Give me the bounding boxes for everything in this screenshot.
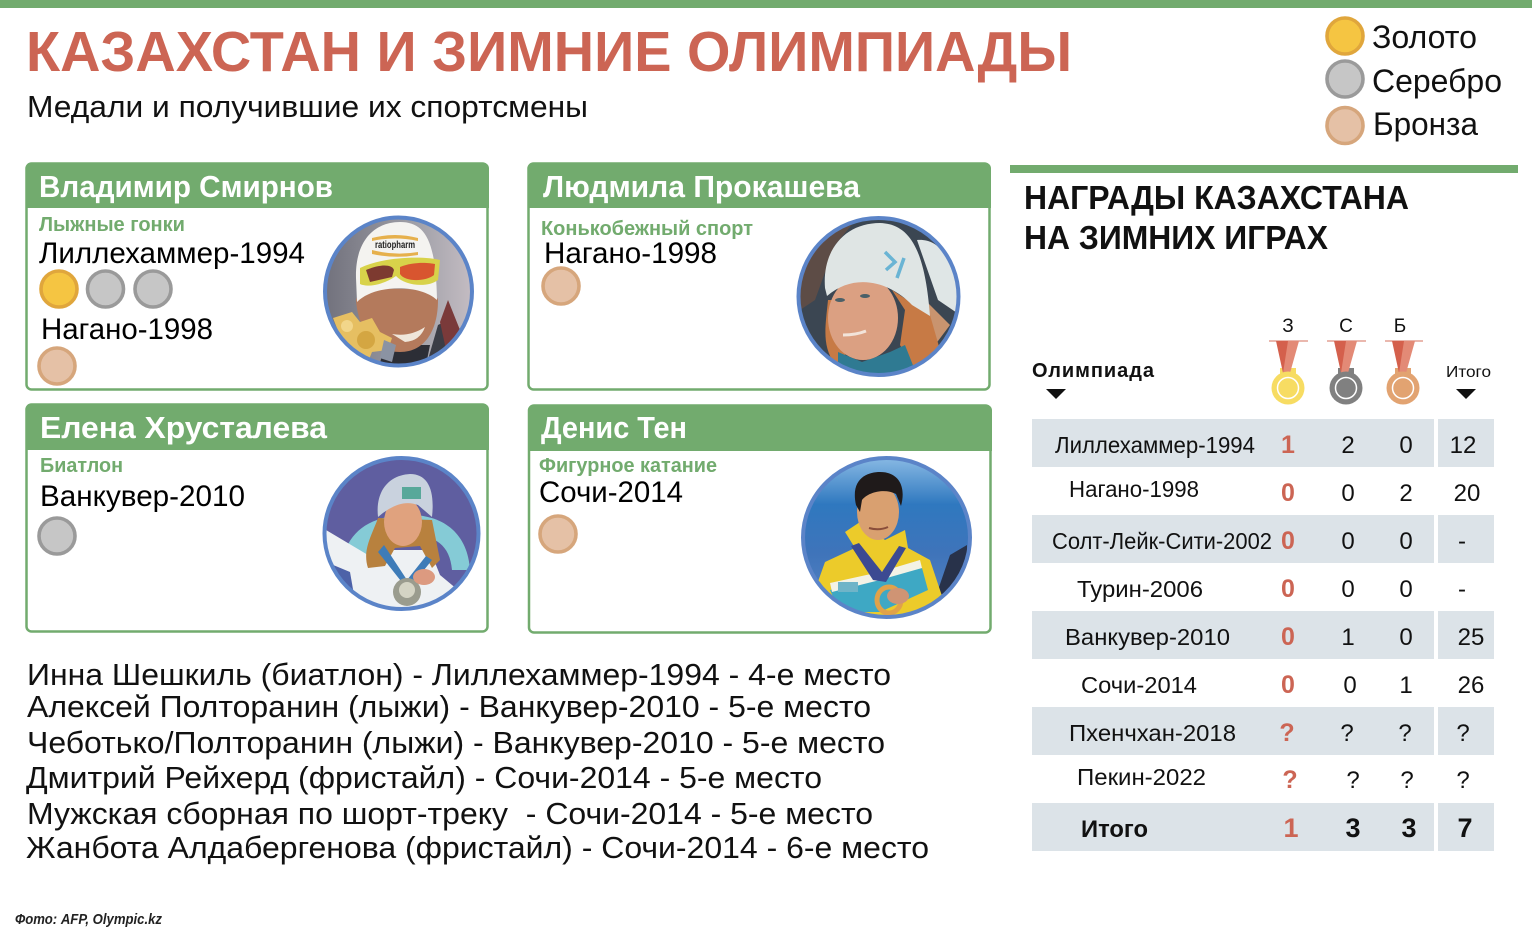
row: Pyeongchang-2018 xyxy=(1032,707,1494,755)
column header: total xyxy=(1446,364,1491,399)
legend: silver: Серебро xyxy=(1372,63,1502,99)
table heading: НАГРАДЫ КАЗАХСТАНА xyxy=(1024,179,1409,216)
photo: Ten xyxy=(800,455,975,620)
panel: Vladimir Smirnov xyxy=(26,163,489,390)
row: Vancouver-2010: 25 xyxy=(1458,624,1484,651)
row: Beijing-2022: ? xyxy=(1346,767,1360,794)
medal: bronze xyxy=(39,348,75,384)
row: Turin-2006: 0 xyxy=(1399,576,1413,603)
row: total xyxy=(1032,803,1494,851)
panel: awards table xyxy=(1010,165,1518,851)
row: Salt Lake City-2002: 0 xyxy=(1281,527,1295,555)
table heading xyxy=(1024,179,1409,256)
column header: silver: С xyxy=(1339,316,1353,337)
sport: Лыжные гонки xyxy=(39,214,185,236)
column header: silver xyxy=(1327,316,1366,404)
row: Beijing-2022: ? xyxy=(1282,766,1298,794)
panel: Denis Ten xyxy=(528,405,992,632)
row: Beijing-2022 xyxy=(1077,764,1470,794)
row: Turin-2006: 0 xyxy=(1281,575,1295,603)
subtitle: Медали и получившие их спортсмены xyxy=(27,89,588,124)
column header: Olympiad xyxy=(1032,360,1155,399)
row: Sochi-2014 xyxy=(1081,671,1484,699)
table heading: НА ЗИМНИХ ИГРАХ xyxy=(1024,219,1328,256)
games: Vancouver: Ванкувер-2010 xyxy=(40,480,245,513)
photo credit: Фото: AFP, Olympic.kz xyxy=(15,911,162,928)
text block: other placings: Чеботько/Полторанин (лыжи) - Ванкувер-2010 - 5-е место xyxy=(27,725,885,760)
column header: Olympiad: Олимпиада xyxy=(1032,360,1155,382)
row: Sochi-2014: Сочи-2014 xyxy=(1081,672,1197,698)
row: Turin-2006: 0 xyxy=(1341,576,1355,603)
legend xyxy=(1327,18,1502,144)
row: Beijing-2022: ? xyxy=(1456,767,1470,794)
row: Lillehammer-1994 xyxy=(1032,419,1494,467)
legend: bronze: Бронза xyxy=(1373,106,1478,142)
text block: other placings: Мужская сборная по шорт-треку - Сочи-2014 - 5-е место xyxy=(27,796,873,831)
row: Turin-2006: Турин-2006 xyxy=(1077,576,1203,602)
games: Lillehammer: Лиллехаммер-1994 xyxy=(39,237,305,270)
games: Nagano: Нагано-1998 xyxy=(544,237,717,270)
row: Salt Lake City-2002: - xyxy=(1458,528,1466,555)
column header: bronze: Б xyxy=(1394,316,1406,337)
games: Nagano: Нагано-1998 xyxy=(41,313,213,346)
medals: gold, silver, silver xyxy=(41,271,171,307)
row: Nagano-1998: Нагано-1998 xyxy=(1069,476,1199,502)
sport: Биатлон xyxy=(40,455,123,477)
text block: other placings: Дмитрий Рейхерд (фристайл) - Сочи-2014 - 5-е место xyxy=(26,760,822,795)
photo: Smirnov xyxy=(320,215,480,370)
title: КАЗАХСТАН И ЗИМНИЕ ОЛИМПИАДЫ xyxy=(26,20,1072,84)
athlete name: Денис Тен xyxy=(541,410,687,445)
sport: Фигурное катание xyxy=(539,455,717,477)
athlete name: Владимир Смирнов xyxy=(39,169,333,204)
athlete name: Людмила Прокашева xyxy=(543,169,861,204)
legend: gold: Золото xyxy=(1372,19,1477,55)
row: Nagano-1998: 20 xyxy=(1454,480,1480,507)
row: Salt Lake City-2002: Солт-Лейк-Сити-2002 xyxy=(1052,528,1272,554)
row: Turin-2006: - xyxy=(1458,576,1466,603)
photo: Prokasheva xyxy=(795,215,965,380)
row: Salt Lake City-2002 xyxy=(1032,515,1494,563)
games: Sochi: Сочи-2014 xyxy=(539,476,683,509)
medal: bronze xyxy=(540,516,576,552)
medal: bronze xyxy=(543,268,579,304)
row: Beijing-2022: Пекин-2022 xyxy=(1077,764,1206,790)
column header: total: Итого xyxy=(1446,364,1491,381)
row: Pyeongchang-2018: ? xyxy=(1340,720,1354,747)
medal: silver xyxy=(39,518,75,554)
column header: gold: З xyxy=(1282,316,1294,337)
row: Vancouver-2010: 0 xyxy=(1281,623,1295,651)
row: total: 3 xyxy=(1401,813,1417,843)
photo: Smirnov: ratiopharm xyxy=(375,240,415,251)
row: Salt Lake City-2002: 0 xyxy=(1341,528,1355,555)
row: Nagano-1998: 0 xyxy=(1281,479,1295,507)
row: Nagano-1998: 2 xyxy=(1399,480,1413,507)
row: Pyeongchang-2018: ? xyxy=(1456,720,1470,747)
row: Salt Lake City-2002: 0 xyxy=(1399,528,1413,555)
row: Vancouver-2010: 0 xyxy=(1399,624,1413,651)
row: total: Итого xyxy=(1081,816,1148,843)
row: Pyeongchang-2018: ? xyxy=(1398,720,1412,747)
row: total: 3 xyxy=(1345,813,1361,843)
row: Pyeongchang-2018: Пхенчхан-2018 xyxy=(1069,720,1236,746)
text block: other placings: Инна Шешкиль (биатлон) - Лиллехаммер-1994 - 4-е место xyxy=(27,657,891,692)
row: Lillehammer-1994: Лиллехаммер-1994 xyxy=(1055,432,1255,458)
row: Sochi-2014: 0 xyxy=(1281,671,1295,699)
panel: Lyudmila Prokasheva xyxy=(528,163,991,390)
text block: other placings: Алексей Полторанин (лыжи) - Ванкувер-2010 - 5-е место xyxy=(27,689,871,724)
row: total: 7 xyxy=(1457,813,1473,843)
panel: Elena Khrustaleva xyxy=(26,404,489,632)
row: Vancouver-2010: Ванкувер-2010 xyxy=(1065,624,1230,650)
row: total: 1 xyxy=(1283,813,1299,843)
column header: gold xyxy=(1269,316,1308,404)
row: Lillehammer-1994: 0 xyxy=(1399,432,1413,459)
row: Sochi-2014: 0 xyxy=(1343,672,1357,699)
row: Nagano-1998 xyxy=(1069,476,1480,507)
row: Vancouver-2010 xyxy=(1032,611,1494,659)
row: Lillehammer-1994: 1 xyxy=(1281,431,1295,459)
column header: bronze xyxy=(1385,316,1423,404)
row: Nagano-1998: 0 xyxy=(1341,480,1355,507)
row: Turin-2006 xyxy=(1077,575,1466,603)
text block: other placings xyxy=(26,657,929,865)
row: Sochi-2014: 26 xyxy=(1458,672,1484,699)
row: Lillehammer-1994: 12 xyxy=(1450,432,1476,459)
text block: other placings: Жанбота Алдабергенова (фристайл) - Сочи-2014 - 6-е место xyxy=(26,830,929,865)
row: Lillehammer-1994: 2 xyxy=(1341,432,1355,459)
athlete name: Елена Хрусталева xyxy=(40,410,328,445)
photo: Khrustaleva xyxy=(320,455,485,615)
row: Beijing-2022: ? xyxy=(1400,767,1414,794)
row: Vancouver-2010: 1 xyxy=(1341,624,1355,651)
sport: Конькобежный спорт xyxy=(541,218,753,240)
row: Pyeongchang-2018: ? xyxy=(1279,719,1295,747)
row: Sochi-2014: 1 xyxy=(1399,672,1413,699)
legend: gold xyxy=(1327,18,1477,55)
legend: bronze xyxy=(1327,106,1478,144)
